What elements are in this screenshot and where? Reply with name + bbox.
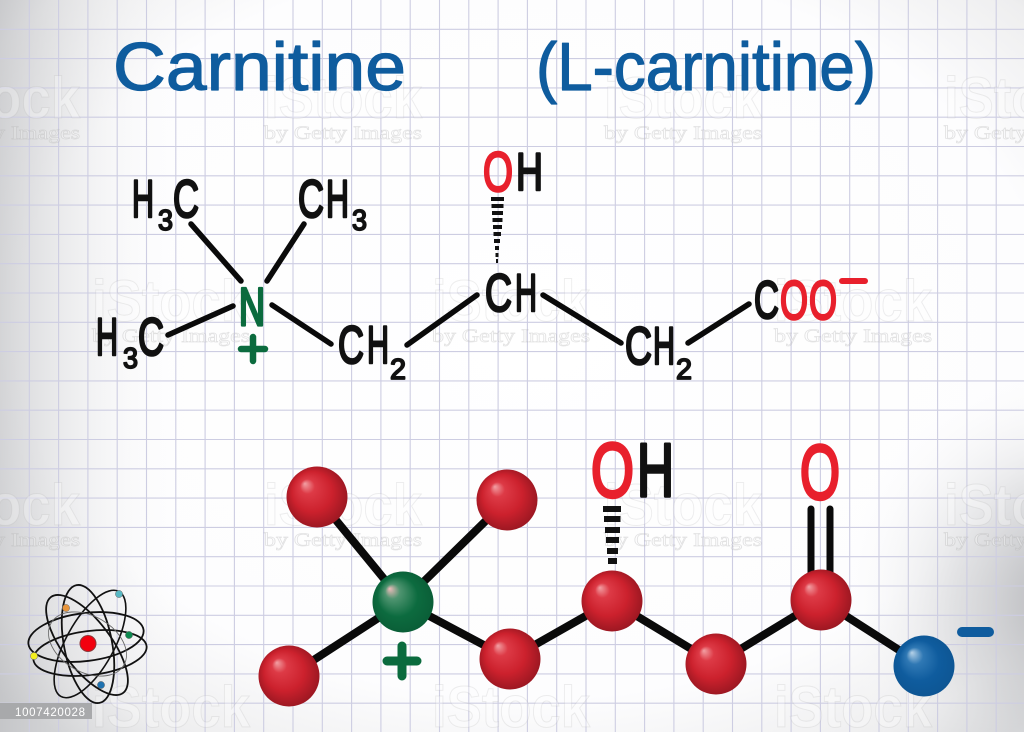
stock watermarks: by Getty Images xyxy=(604,123,762,144)
stock watermarks: by Getty Images xyxy=(264,530,422,551)
label: H3C upper: H xyxy=(132,170,154,229)
stock watermarks: by Getty Images xyxy=(92,326,250,347)
hashed wedge to OH xyxy=(603,509,621,561)
structural formula xyxy=(96,140,865,386)
label: OH: O xyxy=(591,428,634,514)
stock watermarks: iStock xyxy=(264,66,423,131)
stock watermarks: iStock xyxy=(92,269,251,334)
label: CH2 first: H xyxy=(367,316,389,375)
label: OH: H xyxy=(637,428,674,512)
label: N: N xyxy=(239,278,265,337)
stock watermarks: iStock xyxy=(264,473,423,538)
label: COO- xyxy=(754,269,865,331)
plus charge xyxy=(387,646,417,676)
label: CH centre: C xyxy=(485,264,512,323)
label: CH centre: H xyxy=(515,264,537,323)
label: COO-: C xyxy=(754,271,779,330)
icon: atom xyxy=(26,580,149,708)
label: H3C upper: 3 xyxy=(158,205,173,237)
title: (L-carnitine): (L-carnitine) xyxy=(536,29,876,105)
label: COO-: O xyxy=(780,269,808,331)
label: COO-: O xyxy=(809,269,837,331)
label: OH: O xyxy=(483,140,513,203)
label: H3C upper: C xyxy=(173,170,199,229)
label: CH3: 3 xyxy=(352,205,367,237)
plus charge on N xyxy=(241,337,265,361)
stock watermarks: iStock xyxy=(432,269,591,334)
label: CH2 first: 2 xyxy=(390,354,406,386)
formula bonds xyxy=(168,224,749,345)
label: CH3: C xyxy=(298,170,324,229)
label: OH: H xyxy=(516,143,543,202)
label: CH3 xyxy=(298,170,367,237)
label: CH2 second: H xyxy=(653,317,675,376)
stock watermarks: by Getty Images xyxy=(264,123,422,144)
stock watermarks: iStock xyxy=(774,269,933,334)
image id tag: 1007420028 xyxy=(15,707,85,719)
double bond to O xyxy=(811,509,830,575)
image id tag xyxy=(0,703,92,719)
title: Carnitine: Carnitine xyxy=(113,29,406,105)
model bonds xyxy=(289,497,924,676)
stock watermarks: iStock xyxy=(604,66,763,131)
stock watermarks: by Getty Images xyxy=(604,530,762,551)
label: H3C upper xyxy=(132,170,199,237)
stock watermarks: by Getty Images xyxy=(432,326,590,347)
label: CH2 second: C xyxy=(625,317,652,376)
label: H3C lower: H xyxy=(96,308,118,367)
stock watermarks: iStock xyxy=(604,473,763,538)
stock watermarks: by Getty Images xyxy=(774,326,932,347)
label: CH3: H xyxy=(326,170,349,229)
label: O: O xyxy=(800,430,840,516)
label: CH2 first: C xyxy=(338,316,364,375)
atoms xyxy=(258,466,954,706)
label: H3C lower xyxy=(96,308,164,375)
minus charge xyxy=(962,627,989,637)
hashed wedge to OH xyxy=(491,199,504,261)
label: H3C lower: 3 xyxy=(123,343,138,375)
label: H3C lower: C xyxy=(138,308,164,367)
label: CH2 second: 2 xyxy=(676,354,692,386)
ball-and-stick model xyxy=(258,428,989,706)
label: CH2 second xyxy=(625,317,692,386)
label: CH2 first xyxy=(338,316,406,386)
